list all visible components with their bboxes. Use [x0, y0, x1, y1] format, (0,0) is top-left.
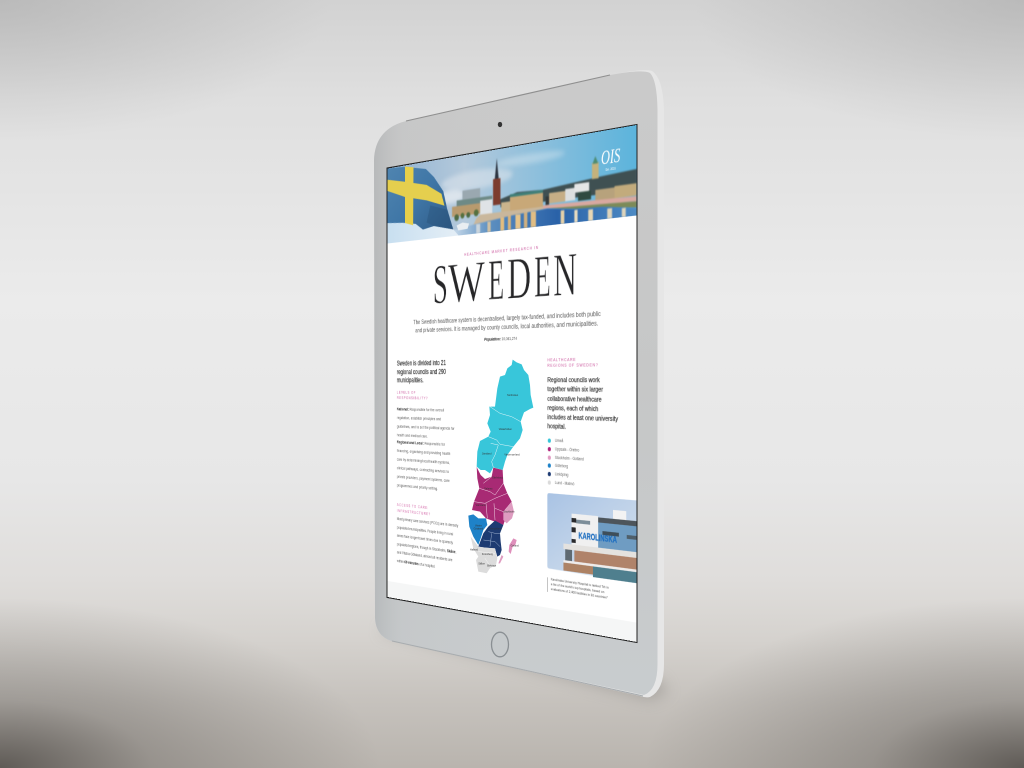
county labels: Jämtland	[482, 452, 492, 455]
caption: evaluations of 2,400 facilities in 30 countries*	[551, 587, 608, 600]
logo: Est. 2001	[513, 140, 518, 146]
county labels: Västra	[475, 525, 482, 528]
county labels: Gävleborg	[492, 476, 503, 479]
heading: access to care: ACCESS TO CARE:	[397, 502, 429, 510]
access text	[396, 516, 458, 569]
county labels: Norrbotten	[507, 394, 519, 397]
national and regional text: regulation, establish principles and	[397, 415, 441, 422]
lead text: Regional councils work	[547, 376, 600, 384]
title: D	[461, 235, 475, 284]
intro paragraph: The Swedish healthcare system is decentralised, largely tax-funded, and includes both public	[413, 310, 601, 326]
boat	[457, 222, 469, 231]
lead text	[396, 359, 446, 384]
region: Lund-Malmö	[471, 537, 497, 573]
national and regional text	[396, 407, 455, 491]
caption	[547, 577, 631, 605]
lead text	[547, 376, 618, 431]
population: Population: 10,081,274	[484, 336, 517, 342]
national and regional text: Regional and Local: Responsible for	[397, 439, 445, 447]
screen page	[388, 125, 637, 642]
legend	[548, 438, 584, 487]
heading: levels of responsibility: LEVELS OF	[397, 390, 416, 395]
title: N	[486, 235, 499, 273]
heading: access to care	[396, 502, 431, 517]
access text: Most primary care services (PCCs) are in densely	[397, 516, 458, 528]
footer band	[388, 581, 637, 642]
county labels: Gotland	[511, 544, 519, 547]
county labels: Kronoberg	[482, 553, 493, 556]
national and regional text: National: Responsible for the overall	[397, 407, 444, 413]
title: E	[476, 235, 485, 277]
title: E	[451, 235, 460, 289]
lead text: regional councils and 290	[397, 367, 446, 375]
city skyline	[452, 135, 637, 229]
access text: and Västra Götaland, almost all residents are	[397, 550, 452, 563]
legend: Göteborg	[555, 464, 568, 469]
heading: access to care: INFRASTRUCTURE?	[397, 508, 431, 517]
county labels: Värmland	[476, 504, 486, 507]
lead text: municipalities.	[397, 376, 424, 384]
county labels: Västernorrland	[504, 453, 520, 456]
region: Linköping	[478, 521, 503, 557]
intro paragraph	[413, 310, 601, 334]
national and regional text: health and medical care.	[397, 432, 428, 439]
national and regional text: programmes and priority setting.	[397, 483, 438, 491]
hospital photo: KAROLINSKA	[578, 533, 623, 547]
legend: Lund - Malmö	[555, 481, 574, 487]
legend: Stockholm - Gotland	[555, 456, 584, 462]
lead text: together within six larger	[547, 386, 603, 394]
region: Umeå	[477, 360, 533, 473]
access text: within 60 minutes of a hospital.	[397, 558, 435, 569]
access text: areas face longer travel times due to sparsely	[397, 533, 453, 545]
lead text: hospital.	[547, 423, 566, 431]
panel: left column	[396, 359, 458, 569]
kicker: HEALTHCARE MARKET RESEARCH IN	[464, 245, 539, 257]
county labels: Götaland	[474, 527, 484, 530]
sky	[388, 125, 637, 243]
heading: levels of responsibility	[396, 390, 428, 400]
county labels: Skåne	[478, 562, 486, 565]
header banner	[388, 125, 636, 244]
region: Stockholm-Gotland	[503, 502, 514, 523]
national and regional text: clinical pathways, contracting services to	[397, 465, 449, 474]
hospital photo	[547, 493, 636, 584]
county labels: Halland	[470, 549, 479, 551]
heading: healthcare regions: HEALTHCARE	[547, 357, 576, 363]
logo: OIS	[511, 125, 520, 144]
region: Uppsala-Örebro	[472, 467, 512, 525]
camera	[498, 122, 502, 127]
county labels	[470, 394, 520, 567]
title	[417, 235, 576, 305]
heading: healthcare regions: REGIONS OF SWEDEN?	[547, 362, 598, 368]
national and regional text: financing, organising and providing health	[397, 448, 450, 456]
water	[453, 197, 637, 237]
lead text: Sweden is divided into 21	[397, 359, 446, 367]
lead text: collaborative healthcare	[547, 395, 602, 403]
home button	[492, 632, 508, 657]
county labels: Östergötland	[488, 527, 502, 530]
panel: right column	[547, 357, 636, 600]
heading: healthcare regions	[547, 357, 598, 368]
access text: populated municipalities. People living in rural	[397, 525, 453, 536]
national and regional text: private providers, payment systems, care	[397, 474, 450, 483]
county borders	[474, 407, 521, 568]
region: Göteborg	[468, 514, 487, 545]
legend: Umeå	[555, 439, 563, 443]
legend: Linköping	[555, 472, 568, 478]
heading: levels of responsibility: RESPONSIBILITY?	[397, 395, 428, 400]
county labels: Dalarna	[484, 487, 493, 490]
intro paragraph: and private services. It is managed by county councils, local authorities, and municipalities.	[415, 320, 598, 334]
national and regional text: care by determining local health systems,	[397, 457, 450, 465]
caption: a list of the world's top hospitals, based on	[551, 583, 604, 594]
flag	[388, 157, 453, 237]
county labels: Västerbotten	[499, 428, 513, 431]
legend: Uppsala - Örebro	[555, 447, 579, 453]
screen frame	[387, 124, 637, 642]
pale foreground	[388, 213, 459, 243]
access text: populated regions, though in Stockholm, Skåne,	[397, 541, 456, 554]
lead text: includes at least one university	[547, 414, 618, 423]
caption: Karolinska University Hospital is ranked 7th in	[551, 578, 609, 590]
county labels: Blekinge	[487, 565, 497, 567]
national and regional text: guidelines, and to set the political agenda for	[397, 424, 455, 431]
county labels: Stockholm	[504, 511, 514, 514]
lead text: regions, each of which	[547, 404, 598, 413]
